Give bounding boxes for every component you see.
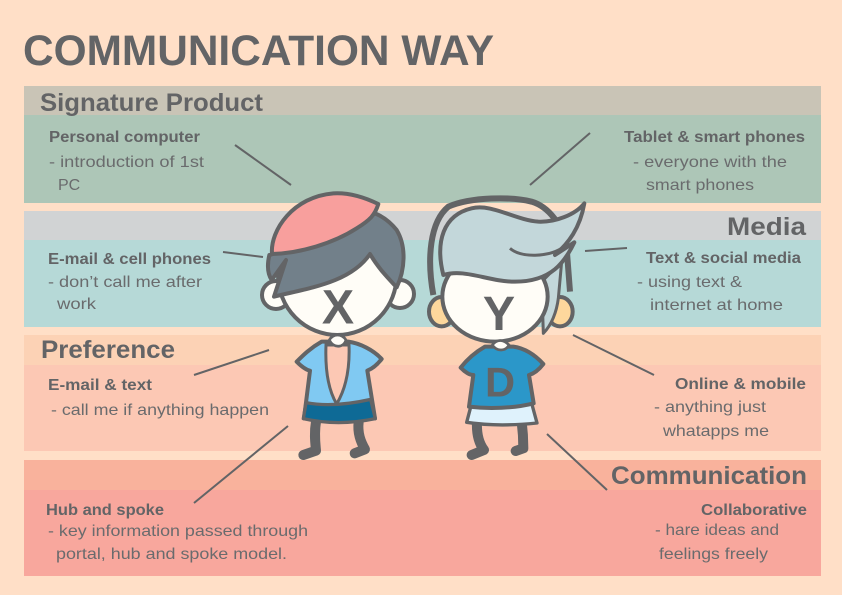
- text: tablet and smart phones: - everyone with the: [633, 154, 787, 171]
- text: text and social media: - using text &: [637, 274, 742, 291]
- text: online and mobile: [654, 376, 806, 440]
- text: hub and spoke: Hub and spoke: [46, 502, 164, 519]
- panel: media: [24, 211, 821, 327]
- character X: [262, 193, 414, 455]
- hair: [440, 203, 584, 282]
- text: collaborative: [655, 502, 807, 563]
- text: personal computer: Personal computer: [49, 129, 200, 146]
- text: collaborative: Collaborative: [701, 502, 807, 519]
- face: [442, 252, 548, 342]
- title: COMMUNICATION WAY: [23, 27, 494, 75]
- text: personal computer: - introduction of 1st: [49, 154, 205, 171]
- connector lines: [194, 133, 654, 503]
- text: tablet and smart phones: [624, 129, 805, 194]
- ears: [429, 297, 454, 326]
- text: hub and spoke: - key information passed through: [48, 523, 308, 540]
- text: text and social media: internet at home: [650, 297, 783, 314]
- open vest: [326, 345, 349, 404]
- text: online and mobile: - anything just: [654, 399, 767, 416]
- panel: signature product: [24, 86, 821, 203]
- text: personal computer: PC: [58, 177, 80, 194]
- t-shirt: [461, 347, 543, 408]
- text: e-mail and cell phones: work: [56, 296, 97, 313]
- heading: signature product: Signature Product: [40, 89, 264, 117]
- text: collaborative: - hare ideas and: [655, 522, 779, 539]
- text: tablet and smart phones: Tablet & smart phones: [624, 129, 805, 146]
- letter D: D: [485, 359, 515, 406]
- text: text and social media: Text & social media: [646, 250, 801, 267]
- text: e-mail and cell phones: E-mail & cell phones: [48, 251, 211, 268]
- face: [278, 215, 397, 335]
- ears: [262, 281, 290, 309]
- legs: [472, 422, 523, 455]
- letter Y: Y: [483, 287, 515, 341]
- back hair: [542, 262, 562, 333]
- text: hub and spoke: portal, hub and spoke model.: [56, 546, 287, 563]
- heading: communication: Communication: [611, 462, 807, 490]
- text: e-mail and text: E-mail & text: [48, 377, 152, 394]
- shirt: [297, 342, 382, 418]
- text: online and mobile: Online & mobile: [675, 376, 806, 393]
- hair: [268, 213, 404, 297]
- shorts: [467, 403, 537, 425]
- text: text and social media: [637, 250, 801, 314]
- text: personal computer: [49, 129, 205, 194]
- text: tablet and smart phones: smart phones: [646, 177, 754, 194]
- shorts: [303, 399, 375, 423]
- text: online and mobile: whatapps me: [662, 423, 769, 440]
- text: e-mail and text: - call me if anything happen: [51, 402, 269, 419]
- letter X: X: [322, 280, 354, 334]
- chin: [492, 340, 509, 350]
- legs: [303, 422, 365, 455]
- hair lock: [510, 248, 562, 255]
- character Y: [429, 198, 584, 455]
- chin: [329, 335, 346, 346]
- heading: preference: Preference: [41, 336, 175, 364]
- hat: [272, 193, 378, 254]
- text: collaborative: feelings freely: [659, 546, 768, 563]
- panel: communication: [24, 460, 821, 576]
- heading: media: Media: [727, 213, 807, 241]
- text: e-mail and text: [48, 377, 269, 419]
- text: e-mail and cell phones: [48, 251, 211, 313]
- text: e-mail and cell phones: - don’t call me after: [48, 274, 203, 291]
- text: hub and spoke: [46, 502, 308, 563]
- headphone band: [430, 198, 570, 295]
- panel: preference: [24, 335, 821, 451]
